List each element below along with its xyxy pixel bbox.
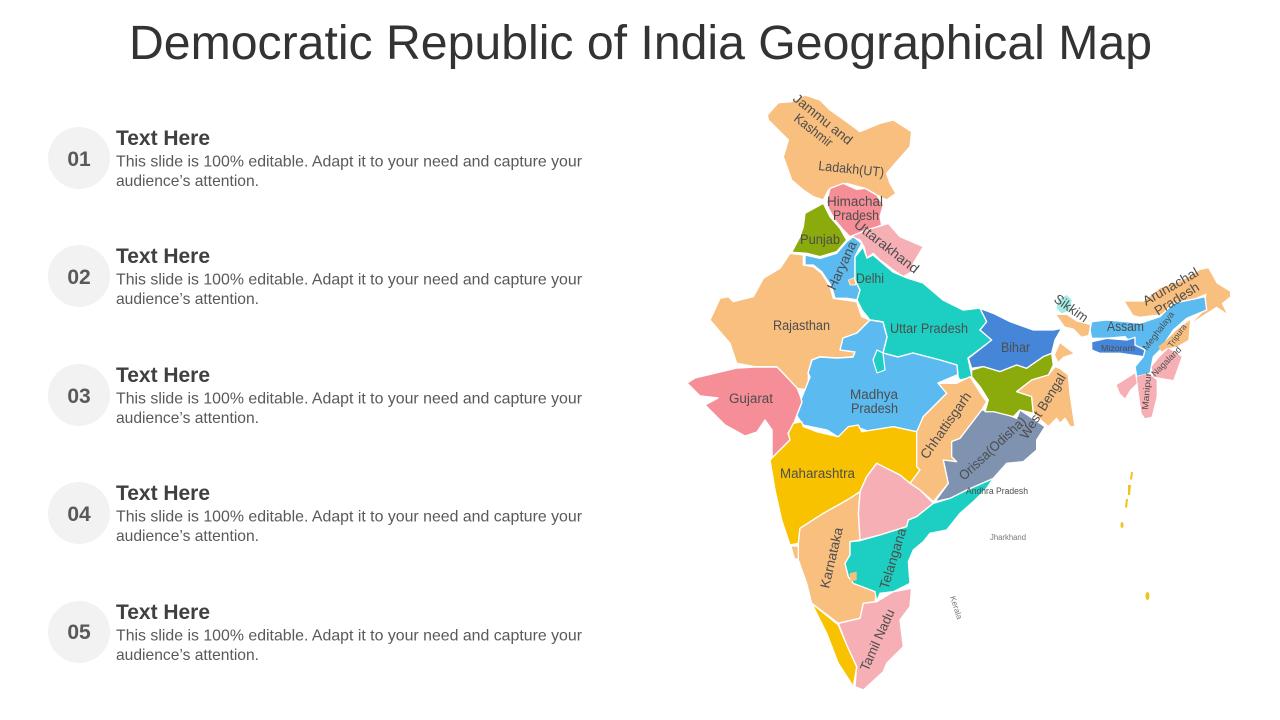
region: Uttar Pradesh enclave <box>873 350 885 373</box>
item 04 <box>48 482 583 545</box>
item 04: Text Here <box>116 482 210 505</box>
label: Pradesh: Pradesh <box>1152 279 1202 319</box>
item 02: Text Here <box>116 245 210 268</box>
label: Jammu and: Jammu and <box>790 91 856 148</box>
region: Andhra Pradesh <box>845 478 993 602</box>
label: Manipur: Manipur <box>1140 372 1153 410</box>
label: Punjab: Punjab <box>800 232 840 247</box>
item 03: 03 <box>67 385 91 408</box>
region: Bihar <box>968 308 1062 372</box>
region: Rajasthan <box>710 253 870 390</box>
label: Sikkim: Sikkim <box>1051 291 1091 325</box>
item 01: This slide is 100% editable. Adapt it to your need and capture your <box>116 154 583 170</box>
region: Meghalaya <box>1092 337 1145 357</box>
southern and central states <box>770 377 1045 690</box>
label: Mizoram: Mizoram <box>1101 343 1135 353</box>
Andaman and Nicobar islands <box>1120 472 1150 600</box>
title: Democratic Republic of India Geographical Map <box>129 17 1152 70</box>
label: Haryana: Haryana <box>824 238 860 292</box>
region: Jammu, Kashmir and Ladakh <box>767 95 912 200</box>
region: West Bengal north <box>1057 315 1090 337</box>
label: Maharashtra: Maharashtra <box>780 466 855 481</box>
label: Kashmir: Kashmir <box>791 111 836 150</box>
label: Nagaland: Nagaland <box>1149 344 1183 378</box>
item 01 <box>48 127 583 190</box>
label: Andhra Pradesh: Andhra Pradesh <box>966 486 1028 496</box>
region: Mizoram <box>1137 373 1157 418</box>
region: Kerala <box>812 603 857 687</box>
list: numbered text items <box>48 127 583 664</box>
label: Pradesh: Pradesh <box>851 401 898 416</box>
region: Gujarat <box>687 367 802 458</box>
item 03 <box>48 364 583 427</box>
label: Kerala: Kerala <box>948 595 964 621</box>
label: Rajasthan: Rajasthan <box>773 318 830 333</box>
label: Uttarakhand: Uttarakhand <box>851 217 922 276</box>
item 03: Text Here <box>116 364 210 387</box>
state labels <box>729 91 1202 673</box>
label: Delhi: Delhi <box>856 271 884 286</box>
item 04: This slide is 100% editable. Adapt it to your need and capture your <box>116 508 583 526</box>
label: Meghalaya: Meghalaya <box>1141 309 1176 352</box>
region: Puducherry enclave <box>849 572 857 582</box>
label: West Bengal: West Bengal <box>1017 371 1069 442</box>
label: Ladakh: Ladakh(UT) <box>818 158 885 180</box>
region: Manipur <box>1152 348 1182 380</box>
label: Madhya: Madhya <box>850 387 898 402</box>
label: Arunachal: Arunachal <box>1140 265 1201 309</box>
label: Pradesh: Pradesh <box>833 208 879 223</box>
region: West Bengal middle <box>1055 343 1073 362</box>
item 02: audience’s attention. <box>116 291 259 308</box>
region: Assam <box>1090 297 1207 377</box>
region: West Bengal south <box>1017 367 1075 427</box>
region: Arunachal Pradesh <box>1125 268 1230 322</box>
label: Karnataka: Karnataka <box>817 525 846 590</box>
label: Uttar Pradesh: Uttar Pradesh <box>890 321 968 336</box>
region: Chhattisgarh <box>910 377 987 502</box>
label: Tamil Nadu: Tamil Nadu <box>857 607 898 673</box>
item 05 <box>48 601 583 664</box>
item 04: audience’s attention. <box>116 528 259 545</box>
region: Delhi <box>848 277 856 285</box>
item 01: Text Here <box>116 127 210 150</box>
item 05: This slide is 100% editable. Adapt it to your need and capture your <box>116 628 583 644</box>
region: Maharashtra <box>770 422 920 545</box>
label: Assam: Assam <box>1107 319 1144 334</box>
label: Tripura: Tripura <box>1165 322 1189 349</box>
item 01: audience’s attention. <box>116 173 259 190</box>
item 03: audience’s attention. <box>116 410 259 427</box>
label: Chhattisgarh: Chhattisgarh <box>917 389 974 462</box>
region: Telangana <box>858 463 933 540</box>
label: Bihar: Bihar <box>1001 340 1030 355</box>
item 05: audience’s attention. <box>116 647 259 664</box>
item 01: 01 <box>67 148 91 171</box>
label: Telangana: Telangana <box>877 526 909 591</box>
item 04: 04 <box>67 503 91 526</box>
region: Goa <box>792 547 798 558</box>
label: Gujarat: Gujarat <box>729 391 773 406</box>
label: Himachal: Himachal <box>827 194 883 209</box>
region: Uttarakhand <box>850 223 923 277</box>
region: Madhya Pradesh <box>795 320 958 437</box>
item 05: 05 <box>67 621 91 644</box>
region: Himachal Pradesh <box>827 183 883 237</box>
label: Jharkhand: Jharkhand <box>990 533 1026 542</box>
region: Tamil Nadu <box>838 588 912 690</box>
item 02 <box>48 245 583 308</box>
item 05: Text Here <box>116 601 210 624</box>
region: Odisha <box>935 410 1045 502</box>
region: Nagaland <box>1158 320 1190 352</box>
region: Uttar Pradesh <box>855 247 992 380</box>
item 02: 02 <box>67 266 91 289</box>
region: Sikkim <box>1057 295 1072 313</box>
region: Karnataka <box>798 492 877 623</box>
region: Jharkhand <box>972 353 1053 417</box>
label: Orissa Odisha: Orissa(Odisha) <box>956 414 1029 483</box>
eastern and north-eastern states <box>968 268 1230 427</box>
map of India <box>687 91 1230 690</box>
region: Punjab <box>792 203 847 257</box>
item 03: This slide is 100% editable. Adapt it to your need and capture your <box>116 390 583 408</box>
item 02: This slide is 100% editable. Adapt it to your need and capture your <box>116 272 583 288</box>
northern and western states <box>710 95 923 390</box>
region: Tripura <box>1117 373 1137 398</box>
region: Haryana <box>805 237 862 300</box>
